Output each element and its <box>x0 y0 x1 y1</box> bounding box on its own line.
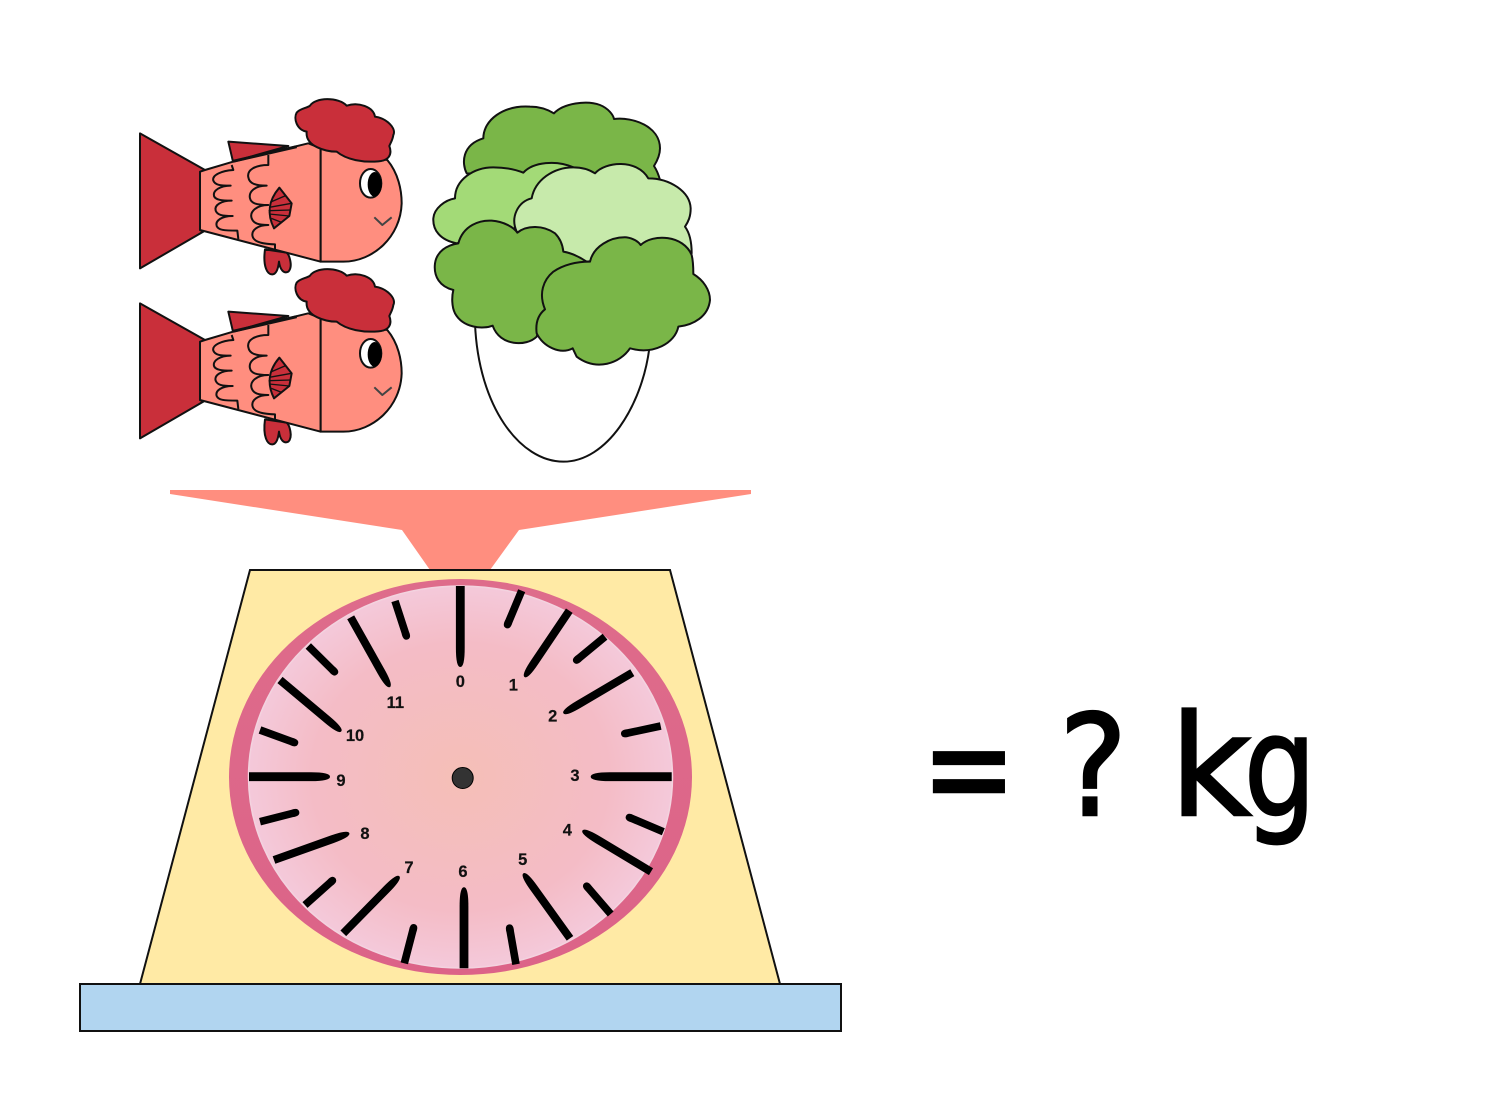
dial numbers <box>336 673 580 881</box>
dial numbers: 0 <box>456 673 465 691</box>
equation text: k <box>1170 686 1251 849</box>
dial rim <box>229 579 692 975</box>
dial hub <box>452 768 473 788</box>
dial numbers: 8 <box>360 825 370 843</box>
minor ticks <box>259 589 665 965</box>
equation text: = <box>922 686 1016 849</box>
dial <box>229 579 692 975</box>
dial numbers: 9 <box>336 772 346 790</box>
dial numbers: 1 <box>509 676 518 694</box>
scale tray <box>170 490 751 570</box>
dial numbers: 4 <box>563 822 573 840</box>
dial numbers: 6 <box>458 863 468 881</box>
major ticks <box>249 586 672 968</box>
equation text <box>922 685 1316 849</box>
fish (bottom) <box>140 269 402 444</box>
equation text: ? <box>1059 685 1127 848</box>
scale base <box>80 984 841 1031</box>
scale body <box>140 570 780 984</box>
fish (top) <box>140 99 402 274</box>
dial numbers: 11 <box>387 694 404 712</box>
dial numbers: 2 <box>548 708 557 726</box>
dial numbers: 5 <box>518 851 527 869</box>
dial face <box>248 586 672 968</box>
dial numbers: 10 <box>346 727 364 745</box>
dial numbers: 7 <box>404 859 414 877</box>
dial numbers: 3 <box>570 767 580 785</box>
cabbage / broccoli <box>433 103 710 462</box>
equation text: g <box>1244 686 1316 849</box>
